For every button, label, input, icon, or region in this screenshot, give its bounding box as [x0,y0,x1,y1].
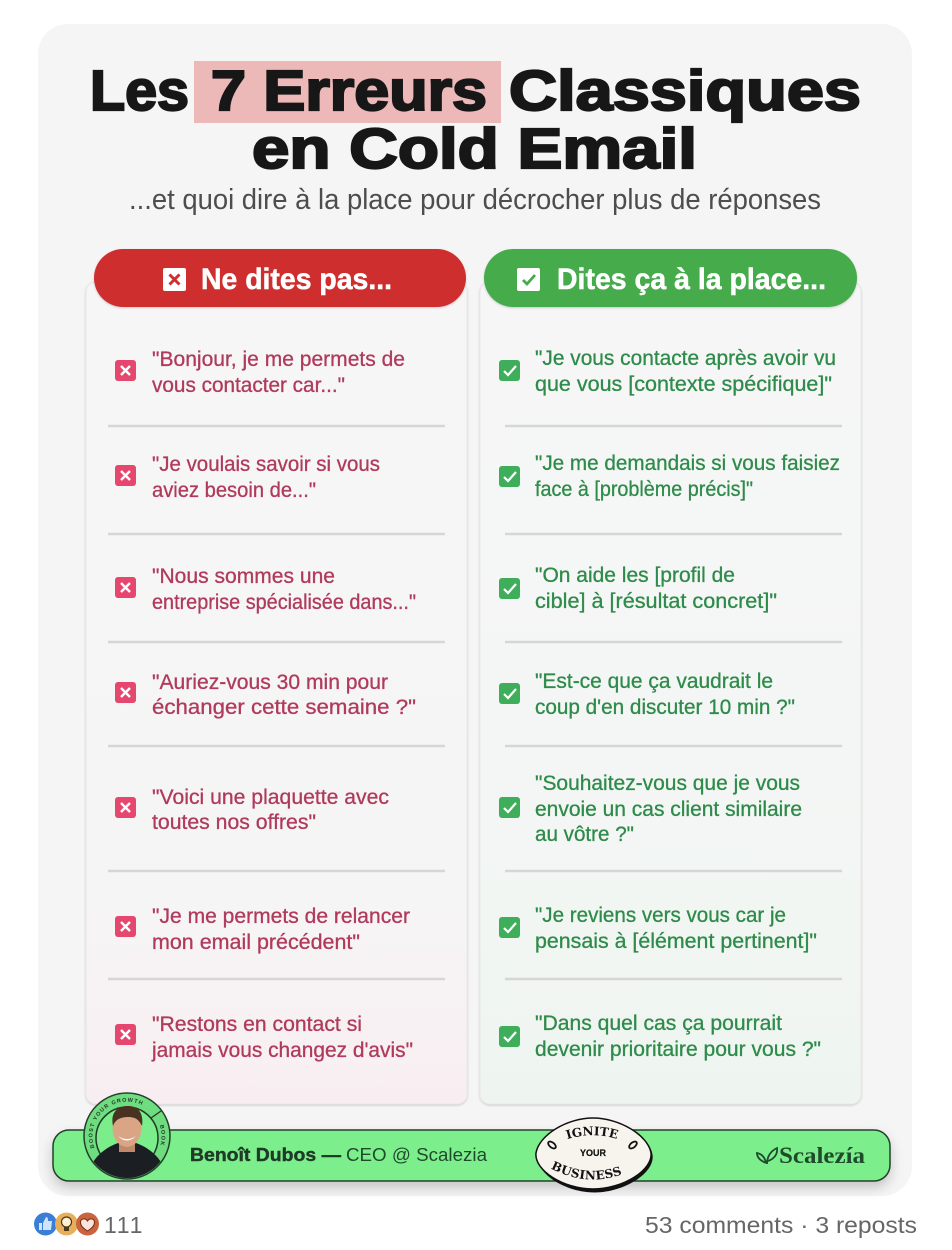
item 1: "Je vous contacte après avoir vu [535,347,836,370]
item 6: pensais à [élément pertinent]" [535,930,817,953]
brand logo: Scalezía [779,1143,866,1168]
card left [86,282,467,1104]
item 3: "On aide les [profil de [535,564,735,587]
header: dites ça à la place [484,249,857,307]
badge text: ignite: IGNITE [565,1126,618,1139]
reaction icons [34,1212,99,1236]
title [90,59,861,180]
icon: like [34,1212,57,1236]
item 2 [499,452,840,501]
item 7 [499,1012,821,1061]
header: ne dites pas [94,249,466,307]
title highlight [194,61,501,123]
comments and reposts: 53 comments · 3 reposts [645,1212,917,1238]
item 2: "Je voulais savoir si vous [152,453,380,476]
item 4: "Auriez-vous 30 min pour [152,671,388,694]
item 2: face à [problème précis]" [535,478,753,501]
item 7 [115,1013,413,1062]
panel: ne dites pas [86,249,467,1104]
item 6: mon email précédent" [152,931,360,954]
title line one: Les [90,59,189,122]
header icon: check [517,268,540,291]
item 5 [499,772,802,846]
header: dites ça à la place: Dites ça à la place... [557,263,826,296]
item 1: "Bonjour, je me permets de [152,348,405,371]
title line one [90,59,861,122]
item 6 [499,904,817,953]
item 7: "Restons en contact si [152,1013,362,1036]
item 7: devenir prioritaire pour vous ?" [535,1038,821,1061]
item 3: "Nous sommes une [152,565,335,588]
item 4: coup d'en discuter 10 min ?" [535,696,795,719]
item 5: au vôtre ?" [535,823,634,846]
badge text: your: YOUR [580,1148,606,1158]
item 6: "Je reviens vers vous car je [535,904,786,927]
icon: heart [76,1212,99,1236]
author name: Benoît Dubos — [190,1144,342,1165]
card right [480,282,861,1104]
item 6: "Je me permets de relancer [152,905,410,928]
item 5: "Voici une plaquette avec [152,786,389,809]
footer bar [53,1130,890,1181]
badge text: business: BUSINESS [551,1160,621,1180]
item 4: échanger cette semaine ?" [152,696,416,719]
item 1: que vous [contexte spécifique]" [535,373,832,396]
item 4 [115,671,416,719]
panel: dites ça à la place [480,249,861,1104]
item 3: cible] à [résultat concret]" [535,590,777,613]
leaf right [628,1140,638,1150]
item 1 [115,348,405,397]
item 2 [115,453,380,502]
item 5: envoie un cas client similaire [535,798,802,821]
item 5: "Souhaitez-vous que je vous [535,772,800,795]
badge ring text: BOOK [160,1124,166,1146]
item 2: "Je me demandais si vous faisiez [535,452,840,475]
header icon: cross [163,268,186,291]
item 1: vous contacter car..." [152,374,345,397]
title line one: 7 Erreurs [211,59,487,122]
item 3 [499,564,777,613]
item 1 [499,347,836,396]
item 3 [115,565,416,614]
item 2: aviez besoin de..." [152,479,316,502]
item 5: toutes nos offres" [152,811,316,834]
item 3: entreprise spécialisée dans..." [152,591,416,614]
item 4 [499,670,795,719]
subtitle: ...et quoi dire à la place pour décrocher plus de réponses [129,184,821,216]
item 5 [115,786,389,834]
item 7: "Dans quel cas ça pourrait [535,1012,782,1035]
header: ne dites pas: Ne dites pas... [201,263,392,296]
badge ring text: BOOST YOUR GROWTH [88,1098,143,1148]
item 7: jamais vous changez d'avis" [151,1039,413,1062]
ignite your business badge [535,1117,653,1192]
icon: idea [55,1212,78,1236]
author name: CEO @ Scalezia [346,1144,488,1165]
reaction count: 111 [104,1212,142,1238]
item 4: "Est-ce que ça vaudrait le [535,670,773,693]
portrait [94,1106,160,1178]
avatar badge [83,1092,171,1180]
author name [190,1144,488,1165]
item 6 [115,905,410,954]
title line one: Classiques [509,59,861,122]
title line two: en Cold Email [252,117,697,180]
leaf left [547,1140,557,1150]
